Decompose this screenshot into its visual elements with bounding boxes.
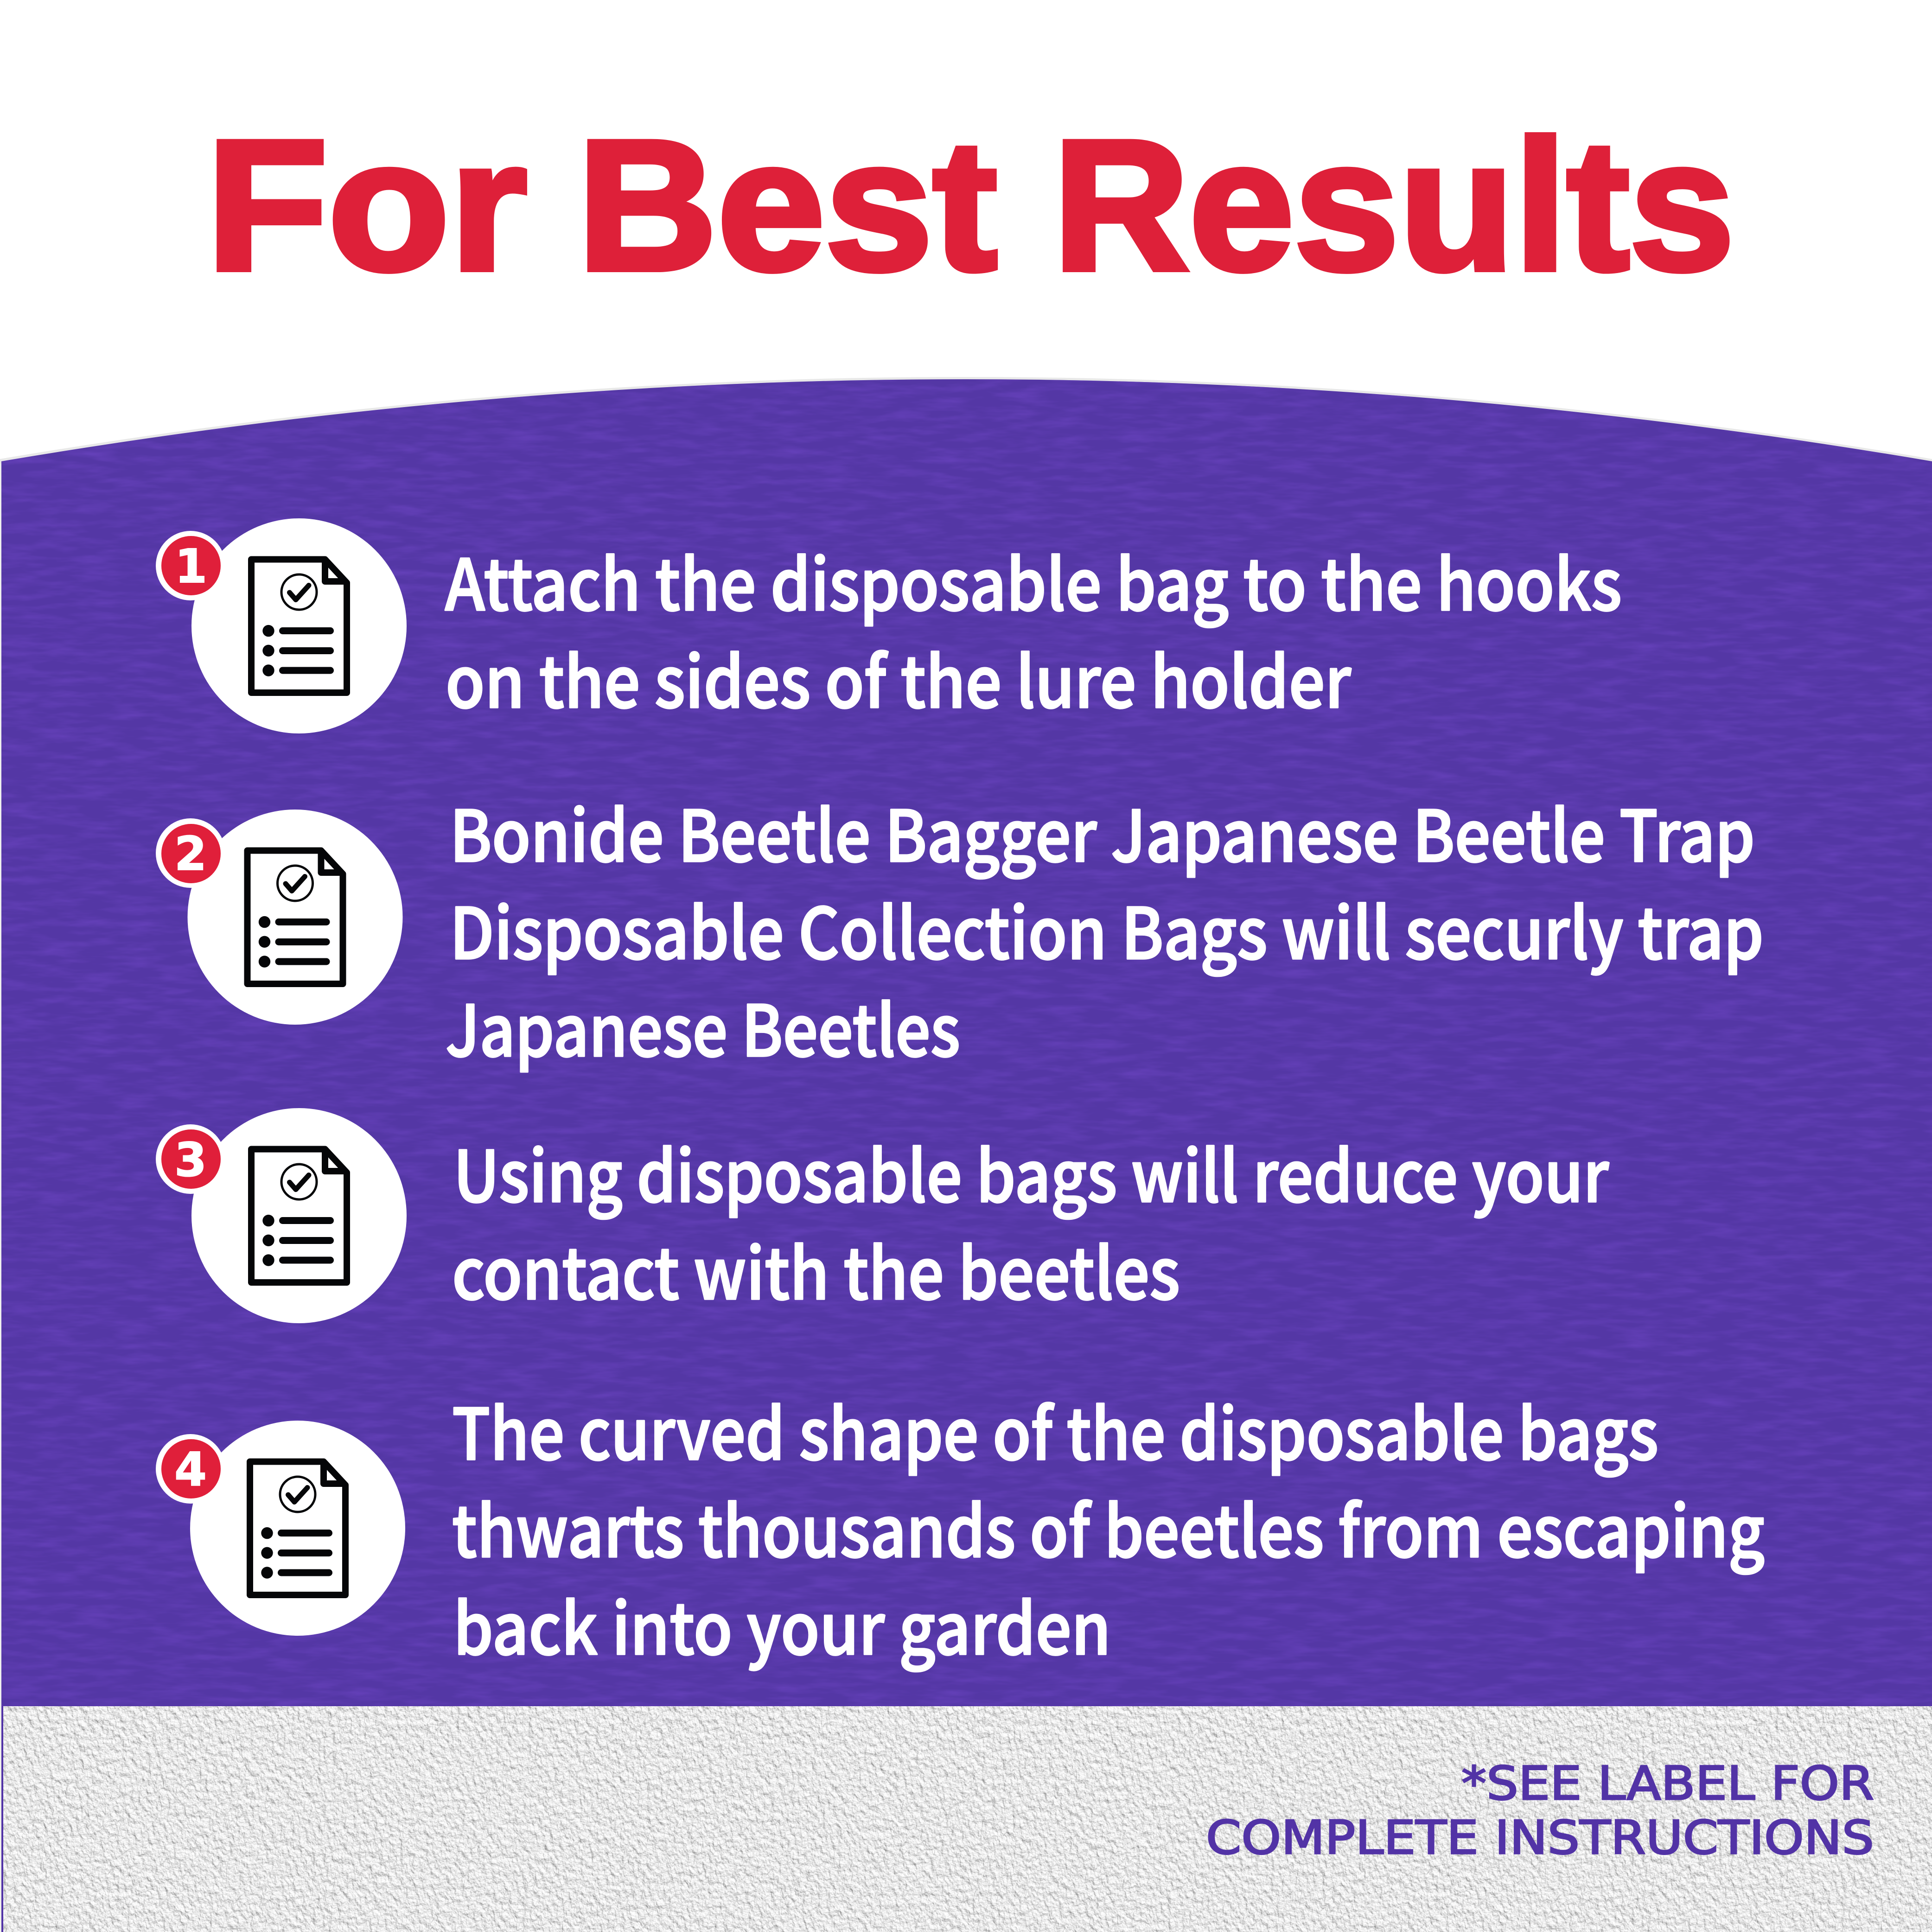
step 1 text: on the sides of the lure holder <box>446 626 1352 728</box>
step 4 text: back into your garden <box>453 1573 1111 1675</box>
step 1 text <box>445 529 1622 728</box>
step 4 number badge: 4 <box>174 1442 207 1497</box>
title: For <box>206 102 527 309</box>
step 2 text: Japanese Beetles <box>446 975 960 1077</box>
footer note: COMPLETE INSTRUCTIONS <box>1206 1811 1874 1865</box>
step 3 text: Using disposable bags will reduce your <box>453 1120 1609 1222</box>
step 2 number badge <box>156 818 225 888</box>
title: Best <box>577 102 997 309</box>
panel: gray textured footer <box>1 1706 1932 1932</box>
step 4 number badge <box>156 1434 225 1504</box>
step 2 text <box>446 780 1764 1077</box>
step 4 icon: checklist document <box>190 1421 405 1636</box>
footer note: *SEE LABEL FOR <box>1461 1756 1874 1811</box>
step 3 number badge: 3 <box>174 1133 207 1187</box>
step 1 text: Attach the disposable bag to the hooks <box>445 529 1622 631</box>
step 3 icon: checklist document <box>191 1108 407 1323</box>
step 1 icon: checklist document <box>191 518 407 733</box>
footer note <box>1206 1756 1874 1865</box>
step 3 text <box>452 1120 1609 1320</box>
step 1 number badge: 1 <box>175 539 207 593</box>
step 3 number badge <box>156 1124 225 1194</box>
title: Results <box>1053 102 1734 309</box>
step 3 text: contact with the beetles <box>452 1218 1180 1320</box>
step 2 text: Bonide Beetle Bagger Japanese Beetle Trap <box>450 780 1755 882</box>
title <box>206 102 1734 309</box>
step 4 text: thwarts thousands of beetles from escaping <box>452 1475 1765 1577</box>
step 2 text: Disposable Collection Bags will securly trap <box>450 877 1764 979</box>
step 2 icon: checklist document <box>187 810 402 1025</box>
step 2 number badge: 2 <box>174 827 207 881</box>
step 1 number badge <box>156 531 225 600</box>
step 4 text <box>452 1378 1765 1675</box>
step 4 text: The curved shape of the disposable bags <box>452 1378 1658 1480</box>
